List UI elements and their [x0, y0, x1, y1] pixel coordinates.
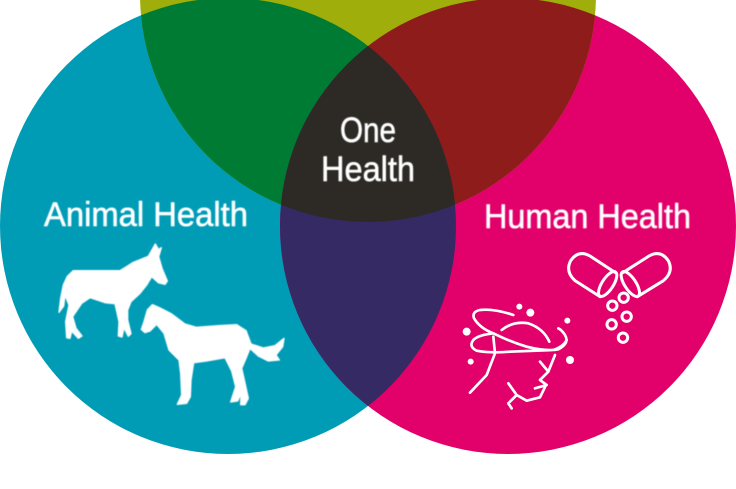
label: One Health — [321, 111, 415, 189]
icon: donkey — [59, 244, 167, 338]
overlap: animal and human — [280, 46, 456, 406]
icon: beads — [607, 293, 631, 342]
overlap: one health centre — [281, 46, 455, 222]
icon: dizzy head — [463, 304, 574, 408]
overlap: human and environment — [281, 0, 595, 205]
icon: stars — [463, 304, 574, 365]
icon: left capsule — [569, 254, 620, 299]
label: One Health: One — [340, 111, 396, 150]
icon: horse — [141, 305, 284, 405]
icon: head outline — [470, 323, 555, 408]
circle: human health — [280, 0, 736, 454]
circle: environment — [140, 0, 596, 222]
overlap: animal and environment — [141, 0, 368, 205]
circle: animal health — [0, 0, 456, 454]
label: Human Health: Human Health — [484, 198, 691, 236]
icon: dizzy rings — [471, 310, 567, 352]
label: One Health: Health — [321, 150, 415, 189]
label: Animal Health: Animal Health — [44, 196, 248, 234]
icon: donkey and horse — [59, 244, 284, 405]
icon: open capsules with beads — [569, 254, 670, 342]
icon: right capsule — [618, 254, 670, 299]
